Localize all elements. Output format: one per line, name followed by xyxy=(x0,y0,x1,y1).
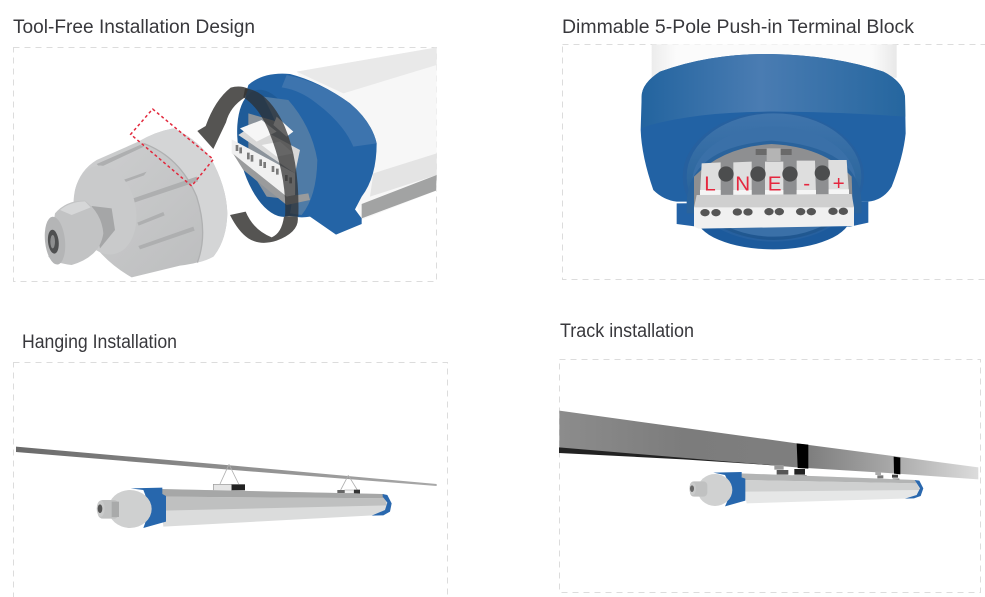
panel: track installation xyxy=(559,360,980,592)
title: hanging installation: Hanging Installation xyxy=(22,332,177,353)
illustration: fixture on track xyxy=(559,411,978,506)
mounting clips xyxy=(774,465,899,481)
icon: terminal block xyxy=(232,117,310,205)
icon: grey gland cap xyxy=(43,128,227,277)
illustration: blue end cap front view xyxy=(641,44,906,249)
fixture tube xyxy=(97,488,392,528)
callout: red dashed marker xyxy=(131,109,213,186)
track rail xyxy=(559,411,978,479)
title: track installation: Track installation xyxy=(560,321,694,342)
title: tool-free installation design: Tool-Free Installation Design xyxy=(13,17,255,38)
icon: terminal block with labels: - xyxy=(803,172,810,195)
black clamps xyxy=(797,443,900,474)
wire rod xyxy=(16,447,437,486)
fixture tube xyxy=(689,472,923,506)
title: dimmable terminal block: Dimmable 5-Pole Push-in Terminal Block xyxy=(562,17,914,38)
icon: terminal block with labels: L xyxy=(704,173,716,196)
illustration: hanging fixture on wire xyxy=(16,447,437,528)
icon: rotation arrow xyxy=(197,87,298,243)
panel: terminal block xyxy=(562,44,985,280)
icon: terminal block with labels: N xyxy=(735,173,750,196)
mounting clips xyxy=(213,484,362,496)
panel: tool-free installation xyxy=(14,47,437,282)
panel: hanging installation xyxy=(14,362,448,597)
icon: terminal block with labels: + xyxy=(833,172,845,195)
illustration: fixture end with blue collar xyxy=(43,47,437,277)
icon: terminal block with labels: E xyxy=(768,173,782,196)
icon: terminal block with labels xyxy=(694,148,854,229)
